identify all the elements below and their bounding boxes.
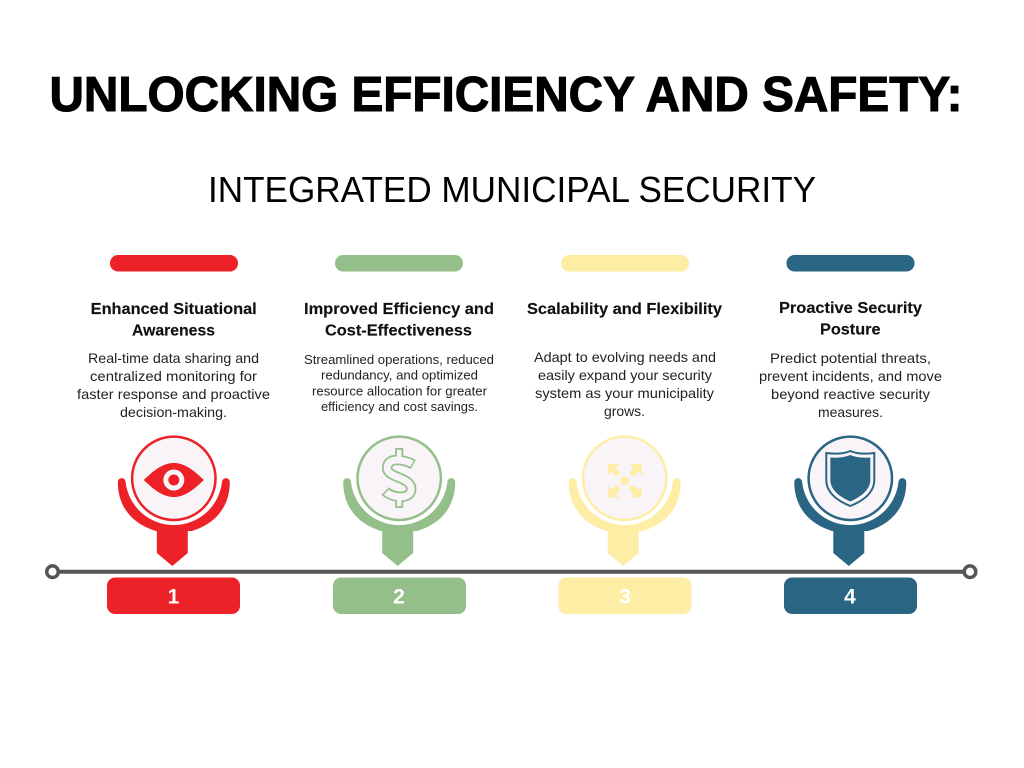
body text 2	[304, 353, 494, 414]
color bar 1	[110, 255, 238, 272]
body text 4: measures.	[818, 404, 883, 420]
heading 1: Enhanced Situational	[91, 301, 257, 318]
body text 4: Predict potential threats,	[770, 350, 931, 366]
body text 1: faster response and proactive	[77, 386, 270, 402]
body text 3: system as your municipality	[535, 385, 714, 401]
body text 2: efficiency and cost savings.	[321, 400, 478, 414]
body text 1: centralized monitoring for	[90, 368, 257, 384]
icon: expand arrows on hand marker	[569, 437, 681, 566]
panel: scalability and flexibility	[527, 255, 722, 614]
icon: dollar on hand marker	[343, 437, 455, 566]
heading 1	[91, 301, 257, 340]
timeline line	[47, 566, 976, 578]
heading 4: Proactive Security	[779, 300, 922, 317]
body text 1	[77, 350, 270, 420]
body text 1: decision-making.	[120, 404, 227, 420]
number badge 3	[558, 578, 692, 614]
panel: enhanced situational awareness	[77, 255, 270, 614]
subtitle: INTEGRATED MUNICIPAL SECURITY	[208, 169, 816, 210]
body text 4: prevent incidents, and move	[759, 368, 942, 384]
icon: shield on hand marker	[794, 437, 906, 566]
number badge 2	[333, 578, 466, 614]
color bar 3	[561, 255, 689, 272]
heading 2: Cost-Effectiveness	[325, 322, 472, 340]
body text 2: Streamlined operations, reduced	[304, 353, 494, 367]
color bar 2	[335, 255, 463, 272]
title: UNLOCKING EFFICIENCY AND SAFETY:	[50, 68, 962, 122]
body text 1: Real-time data sharing and	[88, 350, 259, 366]
heading 4	[779, 300, 922, 338]
number badge 4: 4	[844, 586, 856, 608]
color bar 4	[786, 255, 914, 272]
panel: proactive security posture	[759, 255, 942, 614]
body text 3: easily expand your security	[538, 367, 712, 383]
number badge 3: 3	[619, 586, 631, 608]
body text 3: Adapt to evolving needs and	[534, 349, 716, 365]
body text 4	[759, 350, 942, 420]
heading 4: Posture	[820, 322, 881, 338]
heading 2: Improved Efficiency and	[304, 301, 494, 318]
icon: eye on hand marker	[118, 437, 230, 566]
heading 1: Awareness	[132, 322, 215, 340]
number badge 1	[107, 578, 240, 614]
body text 3: grows.	[604, 403, 645, 419]
number badge 4	[784, 578, 917, 614]
panel: improved efficiency	[304, 255, 494, 614]
body text 3	[534, 349, 716, 419]
number badge 1: 1	[168, 586, 180, 608]
body text 2: redundancy, and optimized	[321, 368, 478, 382]
heading 2	[304, 301, 494, 340]
body text 4: beyond reactive security	[771, 386, 930, 402]
number badge 2: 2	[393, 586, 405, 608]
body text 2: resource allocation for greater	[312, 384, 487, 398]
heading 3: Scalability and Flexibility	[527, 301, 722, 318]
